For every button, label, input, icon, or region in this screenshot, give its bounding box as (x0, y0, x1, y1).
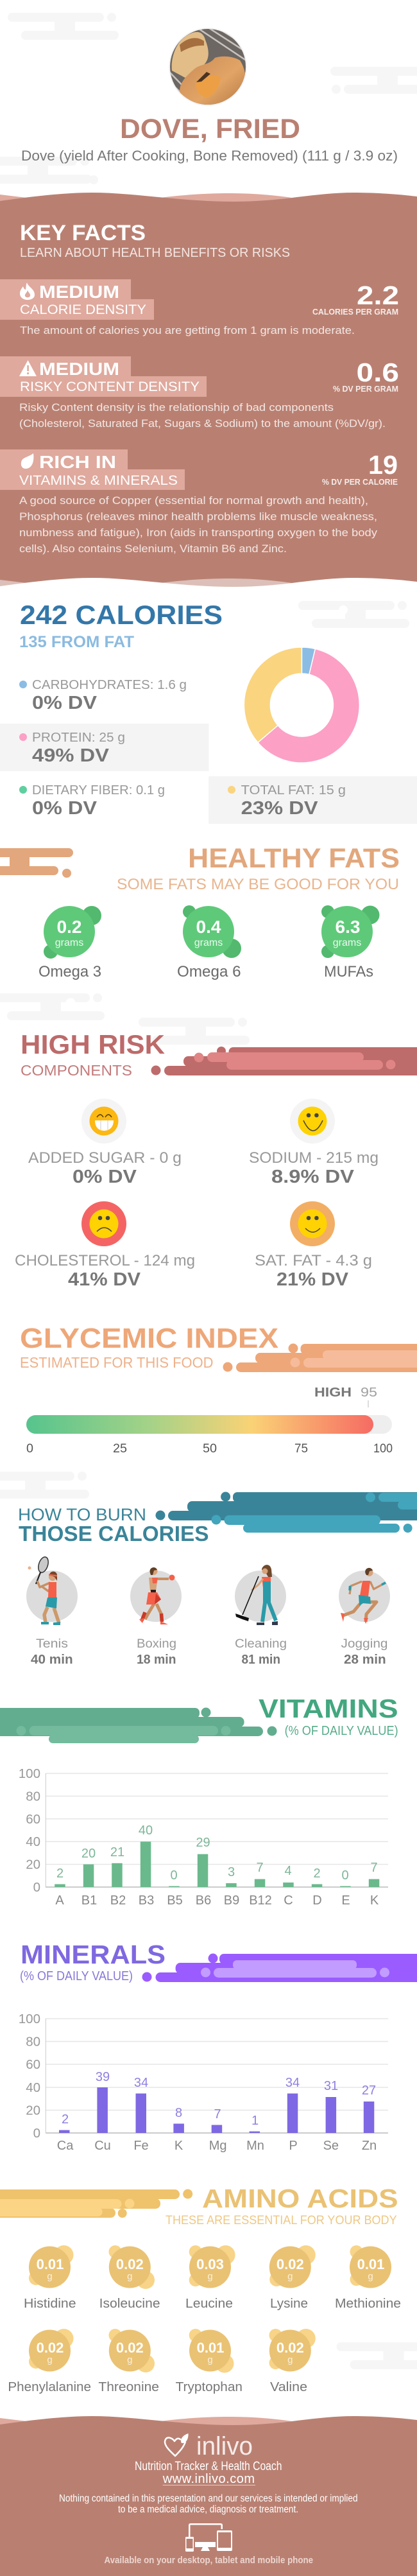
text: calorie density description: The amount of calories you are getting from 1 gram is moderate. (20, 324, 355, 336)
heading: glycemic index: GLYCEMIC INDEX (20, 1323, 278, 1354)
bar chart: minerals: 60 (26, 2057, 40, 2072)
bar chart: vitamins: K (370, 1893, 379, 1908)
gauge: glycemic index: 100 (373, 1442, 393, 1456)
amino: phenylalanine: g (47, 2354, 53, 2365)
bar chart: vitamins: A (55, 1893, 64, 1908)
text: rich in description (19, 494, 378, 555)
decoration: burn header (155, 1492, 417, 1533)
bar chart: minerals: 31 (324, 2079, 338, 2093)
amino: tryptophan (176, 2329, 243, 2394)
bar chart: vitamins: D (312, 1893, 322, 1908)
bar chart: vitamins: B2 (110, 1893, 126, 1908)
bar chart: minerals: 8 (175, 2106, 182, 2120)
disclaimer: to be a medical advice, diagnosis or treatment. (118, 2504, 298, 2515)
stat: dv per gram (333, 358, 399, 394)
heading: minerals: MINERALS (21, 1940, 166, 1969)
bar chart: minerals: 0 (33, 2126, 40, 2141)
activity: boxing: Boxing (137, 1637, 176, 1651)
decoration: amino acids header (0, 2189, 192, 2218)
activity: boxing: 18 min (137, 1653, 176, 1667)
amino: lysine: 0.02 (277, 2256, 304, 2272)
subheading: minerals: (% OF DAILY VALUE) (20, 1969, 133, 1983)
stat: dv per calorie: % DV PER CALORIE (322, 477, 398, 487)
decoration: healthy fats header (0, 848, 73, 878)
bar chart: vitamins: 7 (370, 1861, 378, 1875)
stat: calories per gram: CALORIES PER GRAM (312, 307, 398, 317)
bar chart: vitamins: 21 (110, 1845, 124, 1859)
amino: phenylalanine (8, 2329, 91, 2394)
amino: methionine: 0.01 (357, 2256, 384, 2272)
icon: leaf (21, 453, 33, 469)
amino: histidine (24, 2245, 76, 2311)
legend: protein: PROTEIN: 25 g (32, 731, 125, 745)
subheading: estimated: ESTIMATED FOR THIS FOOD (20, 1354, 213, 1371)
text: risky content description: Risky Content density is the relationship of bad components (19, 401, 334, 413)
amino: leucine: Leucine (185, 2297, 233, 2311)
bar chart: vitamins: C (284, 1893, 293, 1908)
food photo (169, 28, 247, 106)
fat: mufas (321, 905, 380, 980)
bar chart: vitamins: 2 (56, 1867, 64, 1881)
amino: methionine (335, 2245, 401, 2311)
fat: omega 6: 0.4 (196, 917, 221, 937)
amino: isoleucine: 0.02 (116, 2256, 144, 2272)
heading: calories: 242 CALORIES (20, 600, 223, 630)
activity: boxing (130, 1567, 182, 1667)
heading: amino acids: AMINO ACIDS (202, 2184, 398, 2213)
legend: dietary fiber (19, 783, 165, 819)
availability note: Available on your desktop, tablet and mobile phone (104, 2555, 313, 2566)
risk: sodium: 8.9% DV (271, 1167, 355, 1187)
gauge: glycemic index: 95 (361, 1386, 377, 1400)
legend: total fat: TOTAL FAT: 15 g (241, 783, 346, 797)
badge: risky content density: MEDIUM (39, 359, 119, 379)
legend: carbohydrates (19, 678, 187, 713)
amino: tryptophan: g (207, 2354, 213, 2365)
risk: sodium (249, 1099, 379, 1187)
fat: mufas: 6.3 (336, 917, 360, 937)
bar chart: minerals: Mn (246, 2139, 264, 2153)
heading: healthy fats: HEALTHY FATS (188, 843, 400, 874)
badge: rich in vitamins and minerals: RICH IN (39, 452, 116, 472)
bar chart: vitamins: 0 (33, 1880, 40, 1895)
subheading: amino acids: THESE ARE ESSENTIAL FOR YOUR BODY (166, 2214, 397, 2227)
activity: tennis: Tenis (36, 1637, 68, 1651)
fat: omega 6: Omega 6 (177, 963, 241, 980)
risk: added sugar: ADDED SUGAR - 0 g (28, 1149, 182, 1167)
subheading: key facts: LEARN ABOUT HEALTH BENEFITS OR RISKS (20, 246, 290, 260)
heading: vitamins: VITAMINS (259, 1694, 398, 1723)
subheading: from fat: 135 FROM FAT (19, 633, 134, 651)
bar chart: vitamins: B12 (249, 1893, 272, 1908)
activity: cleaning: 81 min (241, 1653, 280, 1667)
bar chart: minerals: P (289, 2139, 298, 2153)
fat: omega 3: Omega 3 (38, 963, 101, 980)
donut chart (244, 647, 359, 763)
badge: calorie density: MEDIUM (39, 282, 119, 302)
heading: key facts: KEY FACTS (20, 221, 146, 245)
activity: jogging: 28 min (344, 1653, 386, 1667)
bar chart: minerals (19, 2012, 388, 2153)
amino: valine (269, 2329, 316, 2394)
stat: dv per gram: % DV PER GRAM (333, 384, 398, 394)
text: rich in description: Phosphorus (releaves minor health problems like muscle weakness, (19, 510, 377, 523)
text: rich in description: numbness and fatigue), Iron (aids in transporting oxygen to the body (19, 527, 378, 539)
bar chart: minerals: Ca (57, 2139, 74, 2153)
bar chart: minerals: 34 (285, 2076, 300, 2090)
activity: tennis (26, 1556, 78, 1667)
legend: dietary fiber: 0% DV (32, 798, 98, 819)
amino: isoleucine (99, 2245, 160, 2311)
bar chart: vitamins: 100 (19, 1766, 40, 1781)
bar chart: minerals: Fe (133, 2139, 149, 2153)
risk: added sugar: 0% DV (72, 1167, 137, 1187)
badge: rich in vitamins and minerals (0, 449, 185, 490)
amino: leucine: 0.03 (196, 2256, 224, 2272)
heading: how to burn: HOW TO BURN (18, 1505, 146, 1524)
subheading: healthy fats: SOME FATS MAY BE GOOD FOR YOU (117, 876, 399, 893)
legend: protein: 49% DV (32, 745, 110, 766)
decoration: high risk header (151, 1047, 417, 1075)
text: rich in description: A good source of Copper (essential for normal growth and health), (19, 494, 368, 507)
legend: dietary fiber: DIETARY FIBER: 0.1 g (32, 783, 165, 797)
heading: those calories: THOSE CALORIES (19, 1522, 209, 1545)
icon: inlivo heart logo (165, 2433, 189, 2456)
bar chart: vitamins: 40 (26, 1834, 40, 1849)
badge: calorie density (0, 279, 154, 320)
stat: dv per calorie (322, 450, 398, 487)
stat: calories per gram (312, 281, 399, 317)
amino: lysine: g (287, 2271, 293, 2282)
icon: warning (19, 360, 37, 376)
bar chart: vitamins: 2 (313, 1867, 321, 1881)
decoration: minerals header (142, 1953, 417, 1982)
bar chart: minerals: 34 (134, 2076, 148, 2090)
bar chart: vitamins: 80 (26, 1789, 40, 1804)
bar chart: vitamins: 0 (341, 1868, 349, 1883)
title: DOVE, FRIED (120, 114, 300, 144)
logo text: inlivo (196, 2432, 253, 2460)
bar chart: minerals: Se (323, 2139, 339, 2153)
risk: cholesterol: CHOLESTEROL - 124 mg (15, 1252, 195, 1269)
fat: mufas: MUFAs (324, 963, 373, 980)
bar chart: vitamins: 40 (139, 1823, 153, 1838)
activity: cleaning (235, 1565, 287, 1667)
panel: footer (0, 2416, 417, 2576)
amino: tryptophan: Tryptophan (176, 2380, 243, 2394)
amino: threonine: g (127, 2354, 132, 2365)
bar chart: vitamins: 4 (284, 1864, 292, 1878)
stat: dv per gram: 0.6 (357, 358, 399, 387)
gauge: glycemic index: 0 (26, 1442, 33, 1456)
fat: omega 6: grams (194, 937, 223, 948)
badge: risky content density (0, 356, 207, 397)
amino: histidine: 0.01 (37, 2256, 64, 2272)
subheading: components: COMPONENTS (21, 1062, 132, 1079)
subtitle: Dove (yield After Cooking, Bone Removed) (111 g / 3.9 oz) (21, 148, 398, 164)
stat: calories per gram: 2.2 (357, 281, 399, 310)
bar chart: minerals: 2 (62, 2112, 69, 2127)
bar chart: minerals: Cu (94, 2139, 111, 2153)
amino: tryptophan: 0.01 (197, 2340, 224, 2356)
stat: dv per calorie: 19 (368, 450, 398, 480)
gauge: glycemic index (26, 1386, 393, 1456)
icon: flame (20, 283, 35, 300)
bar chart: minerals: 1 (251, 2114, 259, 2128)
amino: methionine: g (368, 2271, 373, 2282)
bar chart: minerals: 20 (26, 2103, 40, 2118)
activity: tennis: 40 min (31, 1653, 73, 1667)
bar chart: minerals: Zn (362, 2139, 377, 2153)
amino: valine: g (287, 2354, 293, 2365)
bar chart: vitamins: 3 (228, 1865, 235, 1879)
amino: valine: Valine (270, 2380, 307, 2394)
bar chart: vitamins: 20 (81, 1847, 96, 1861)
text: risky content description (19, 401, 386, 430)
decoration: glycemic header (223, 1343, 417, 1372)
bar chart: vitamins (19, 1766, 388, 1908)
text: rich in description: cells). Also contains Selenium, Vitamin B6 and Zinc. (19, 543, 287, 555)
bar chart: minerals: 40 (26, 2080, 40, 2095)
amino: histidine: g (47, 2271, 53, 2282)
risk: cholesterol: 41% DV (68, 1269, 141, 1290)
bar chart: minerals: K (174, 2139, 183, 2153)
amino: valine: 0.02 (277, 2340, 304, 2356)
bar chart: minerals: 7 (214, 2107, 221, 2121)
legend: total fat: 23% DV (241, 798, 318, 819)
amino: histidine: Histidine (24, 2297, 76, 2311)
amino: threonine (98, 2329, 159, 2394)
bar chart: minerals: Mg (209, 2139, 226, 2153)
risk: saturated fat (255, 1201, 372, 1290)
bar chart: vitamins: B3 (139, 1893, 154, 1908)
legend: carbohydrates: CARBOHYDRATES: 1.6 g (32, 678, 187, 692)
gauge: glycemic index: 25 (113, 1442, 127, 1456)
amino: leucine (185, 2245, 235, 2311)
fat: omega 3: grams (55, 937, 83, 948)
badge: rich in vitamins and minerals: VITAMINS & MINERALS (19, 473, 178, 488)
bar chart: vitamins: 60 (26, 1812, 40, 1827)
gauge: glycemic index: 75 (294, 1442, 308, 1456)
risk: sodium: SODIUM - 215 mg (249, 1149, 379, 1167)
amino: phenylalanine: 0.02 (37, 2340, 64, 2356)
disclaimer: Nothing contained in this presentation and our services is intended or implied (59, 2493, 358, 2504)
risk: saturated fat: 21% DV (277, 1269, 349, 1290)
fat: omega 6 (177, 905, 241, 980)
bar chart: vitamins: 29 (196, 1836, 210, 1850)
bar chart: vitamins: B6 (196, 1893, 211, 1908)
decoration: vitamins header (0, 1708, 277, 1743)
badge: calorie density: CALORIE DENSITY (20, 302, 146, 317)
fat: omega 3: 0.2 (57, 917, 81, 937)
amino: methionine: Methionine (335, 2297, 401, 2311)
bar chart: minerals: 100 (19, 2012, 40, 2026)
amino: isoleucine: Isoleucine (99, 2297, 160, 2311)
website link: www.inlivo.com (162, 2472, 255, 2486)
gauge: glycemic index: 50 (203, 1442, 217, 1456)
bar chart: vitamins: B9 (224, 1893, 239, 1908)
panel: key facts (0, 193, 417, 600)
amino: phenylalanine: Phenylalanine (8, 2380, 91, 2394)
legend: carbohydrates: 0% DV (32, 693, 98, 713)
disclaimer (59, 2493, 358, 2515)
bar chart: vitamins: E (341, 1893, 350, 1908)
bar chart: minerals: 80 (26, 2034, 40, 2049)
amino: isoleucine: g (127, 2271, 132, 2282)
amino: threonine: Threonine (98, 2380, 159, 2394)
amino: lysine (269, 2245, 316, 2311)
fat: mufas: grams (333, 937, 361, 948)
text: risky content description: (Cholesterol, Saturated Fat, Sugars & Sodium) to the amount (%DV/gr). (19, 417, 386, 430)
tagline: Nutrition Tracker & Health Coach (135, 2460, 282, 2473)
bar chart: vitamins: B1 (81, 1893, 97, 1908)
risk: saturated fat: SAT. FAT - 4.3 g (255, 1252, 372, 1269)
risk: cholesterol (15, 1201, 195, 1290)
amino: threonine: 0.02 (116, 2340, 144, 2356)
activity: cleaning: Cleaning (235, 1637, 287, 1651)
bar chart: vitamins: B5 (167, 1893, 183, 1908)
amino: lysine: Lysine (270, 2297, 308, 2311)
legend: total fat (208, 776, 417, 824)
fat: omega 3 (38, 906, 101, 980)
icon: devices (185, 2523, 232, 2552)
gauge: glycemic index: HIGH (314, 1386, 352, 1400)
bar chart: minerals: 39 (96, 2070, 110, 2084)
subheading: vitamins: (% OF DAILY VALUE) (285, 1724, 398, 1738)
bar chart: vitamins: 0 (170, 1868, 178, 1883)
bar chart: vitamins: 7 (256, 1861, 264, 1875)
bar chart: minerals: 27 (362, 2084, 376, 2098)
activity: jogging: Jogging (341, 1637, 387, 1651)
amino: leucine: g (207, 2271, 213, 2282)
legend: protein (0, 724, 209, 771)
activity: jogging (339, 1568, 390, 1667)
risk: added sugar (28, 1099, 182, 1187)
heading: high risk: HIGH RISK (21, 1029, 165, 1059)
bar chart: vitamins: 20 (26, 1858, 40, 1872)
badge: risky content density: RISKY CONTENT DENSITY (20, 379, 200, 394)
